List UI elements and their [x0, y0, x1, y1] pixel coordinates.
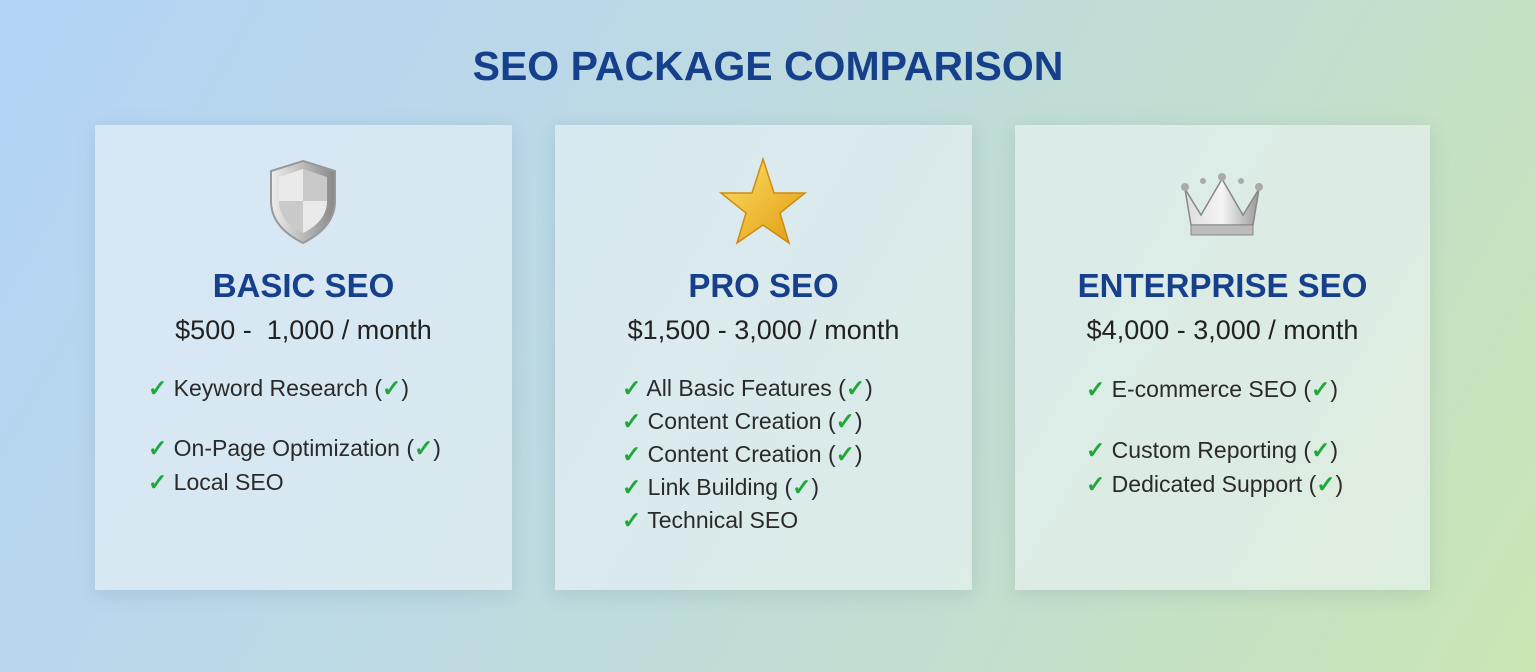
features: [1086, 376, 1343, 497]
panel: pro: ✓ All Basic Features (✓): [622, 375, 873, 401]
panel: enterprise: ✓ Custom Reporting (✓): [1086, 437, 1338, 463]
panel: pro: ✓ Content Creation (✓): [622, 441, 863, 467]
panel: basic: [95, 125, 512, 590]
panel: basic: ✓ On-Page Optimization (✓): [148, 435, 441, 461]
panel: pro: ✓ Technical SEO: [622, 507, 798, 533]
panel: enterprise: ✓ Dedicated Support (✓): [1086, 471, 1343, 497]
price: $500 - 1,000 / month: [175, 315, 432, 345]
features: [148, 375, 441, 495]
heading: PRO SEO: [688, 267, 839, 304]
icon: crown: [1181, 173, 1263, 236]
panel: enterprise: ✓ E-commerce SEO (✓): [1086, 376, 1338, 402]
icon: shield: [270, 160, 336, 244]
heading: ENTERPRISE SEO: [1078, 267, 1367, 304]
panel: pro: ✓ Link Building (✓): [622, 474, 819, 500]
panel: basic: ✓ Keyword Research (✓): [148, 375, 409, 401]
title: SEO PACKAGE COMPARISON: [473, 43, 1063, 89]
panel: basic: ✓ Local SEO: [148, 469, 284, 495]
panel: pro: [555, 125, 972, 590]
features: [622, 375, 873, 533]
price: $1,500 - 3,000 / month: [628, 315, 899, 345]
panel: pro: ✓ Content Creation (✓): [622, 408, 863, 434]
icon: star: [719, 156, 807, 245]
panel: enterprise: [1015, 125, 1430, 590]
price: $4,000 - 3,000 / month: [1087, 315, 1358, 345]
heading: BASIC SEO: [213, 267, 394, 304]
